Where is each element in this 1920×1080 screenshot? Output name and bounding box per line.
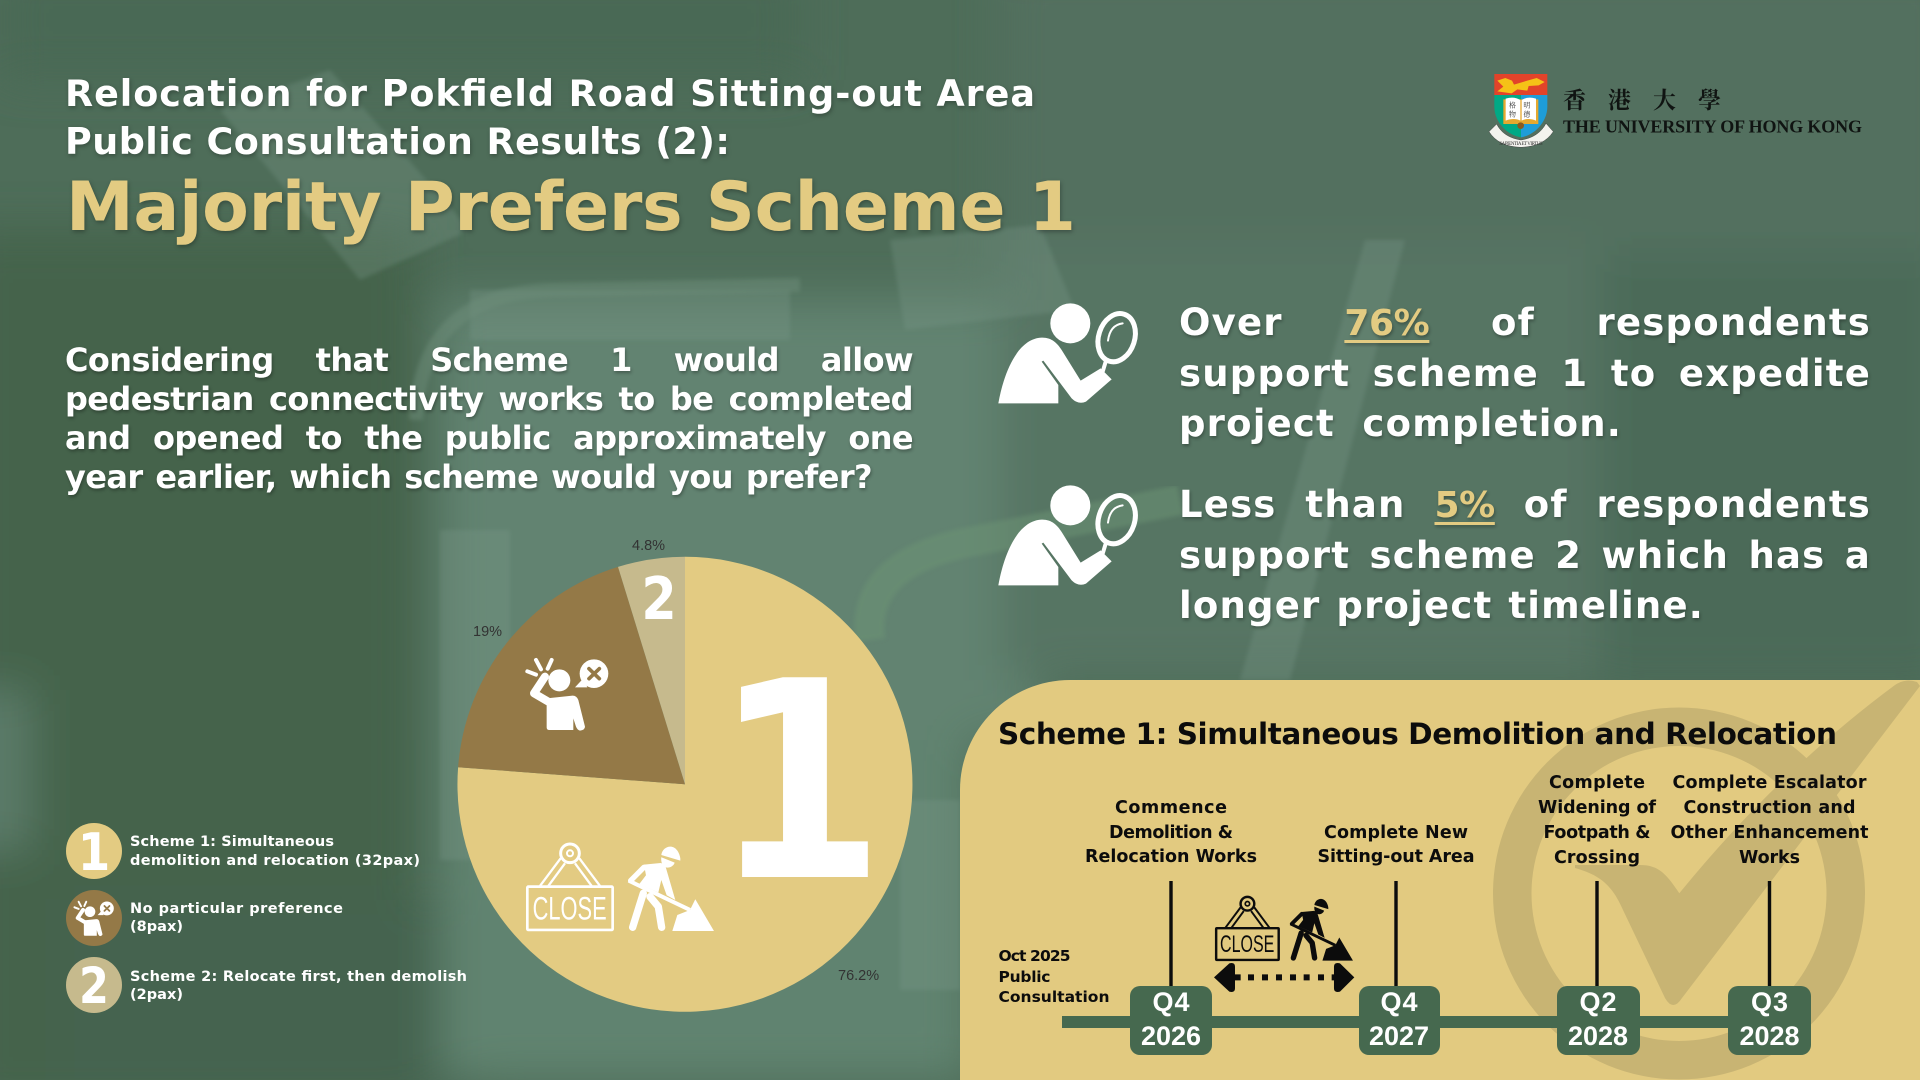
icon: person with magnifier 2 xyxy=(998,485,1141,585)
milestone Q4 2026: Q4 xyxy=(1152,987,1190,1017)
survey question: pedestrian connectivity works to be completed xyxy=(65,380,913,418)
title line 2: Public Consultation Results (2): xyxy=(65,120,730,163)
milestone Q4 2027 xyxy=(1318,823,1474,1055)
icon: confused person xyxy=(527,659,608,731)
milestone Q3 2028: 2028 xyxy=(1740,1021,1800,1051)
milestone Q2 2028: Crossing xyxy=(1554,848,1640,868)
logo crest: SAPIENTIA ET VIRTUS xyxy=(1499,142,1543,147)
milestone Q2 2028: Footpath & xyxy=(1544,823,1650,843)
survey question: Considering that Scheme 1 would allow xyxy=(65,341,913,379)
logo crest xyxy=(1489,74,1553,147)
arrow: construction duration xyxy=(1214,963,1354,992)
milestone Q3 2028: Q3 xyxy=(1751,987,1788,1017)
milestone Q4 2026: Commence xyxy=(1115,798,1227,818)
timeline xyxy=(998,773,1868,1055)
finding: 76% support scheme 1: Over 76% of respondents xyxy=(1179,301,1871,344)
title line 1: Relocation for Pokfield Road Sitting-out Area xyxy=(65,72,1035,115)
finding: under 5% support scheme 2: Less than 5% of respondents xyxy=(1179,483,1871,526)
legend item: no preference xyxy=(66,890,343,946)
timeline bar xyxy=(1062,1016,1752,1028)
finding: 76% support scheme 1: project completion. xyxy=(1179,402,1622,445)
logo crest: 德 xyxy=(1523,108,1531,118)
milestone Q4 2026 xyxy=(1085,798,1257,1055)
start label: Oct 2025 public consultation: Consultation xyxy=(998,988,1110,1006)
milestone Q3 2028: Construction and xyxy=(1684,798,1856,818)
logo English name: THE UNIVERSITY OF HONG KONG xyxy=(1563,116,1862,136)
milestone Q4 2027: Sitting-out Area xyxy=(1318,847,1474,867)
icon: worker with shovel xyxy=(629,847,714,931)
panel heading: Scheme 1: Simultaneous Demolition and Relocation xyxy=(998,717,1837,751)
milestone Q4 2026: Demolition & xyxy=(1109,823,1233,843)
milestone Q2 2028: Q2 xyxy=(1580,987,1616,1017)
legend item: scheme 1: Scheme 1: Simultaneous xyxy=(130,834,334,850)
title block xyxy=(65,72,1076,247)
pie label 4.8%: 4.8% xyxy=(632,538,665,554)
finding: under 5% support scheme 2: support scheme 2 which has a xyxy=(1179,534,1871,577)
finding: 76% support scheme 1: support scheme 1 to expedite xyxy=(1179,352,1871,395)
slice: scheme 1 xyxy=(457,557,912,1012)
icon: close sign: CLOSE xyxy=(533,889,607,926)
pie label 76.2%: 76.2% xyxy=(838,968,879,984)
slice: no preference xyxy=(458,567,685,784)
milestone Q3 2028: Other Enhancement xyxy=(1670,823,1868,843)
icon: worker with shovel, black xyxy=(1290,899,1353,961)
watermark: check mark in ring xyxy=(1493,681,1920,1080)
start label: Oct 2025 public consultation: Public xyxy=(998,968,1050,986)
legend item: scheme 2: Scheme 2: Relocate first, then demolish xyxy=(130,969,467,985)
legend item: scheme 1: demolition and relocation (32pax) xyxy=(130,853,420,869)
milestone Q2 2028: Complete xyxy=(1549,773,1645,793)
finding: under 5% support scheme 2: longer project timeline. xyxy=(1179,584,1704,627)
main headline: Majority Prefers Scheme 1 xyxy=(66,168,1076,247)
survey question: and opened to the public approximately one xyxy=(65,419,913,457)
panel: scheme 1 timeline xyxy=(960,680,1920,1080)
milestone Q3 2028 xyxy=(1670,773,1868,1055)
connector lines xyxy=(1171,881,1770,986)
legend item: no preference: No particular preference xyxy=(130,901,343,917)
finding: 76% support scheme 1 xyxy=(1179,301,1871,447)
finding: under 5% support scheme 2 xyxy=(1179,483,1871,630)
logo crest: 格 xyxy=(1509,99,1516,109)
pie label 19%: 19% xyxy=(473,624,502,640)
milestone Q2 2028 xyxy=(1538,773,1656,1055)
legend item: scheme 2: (2pax) xyxy=(130,987,183,1003)
legend item: scheme 1: 1 xyxy=(78,822,110,883)
pie chart xyxy=(457,538,912,1012)
milestone Q4 2027: Complete New xyxy=(1324,823,1468,843)
survey question xyxy=(65,341,914,498)
start label: Oct 2025 public consultation: Oct 2025 xyxy=(998,947,1070,965)
numeral 1: 1 xyxy=(713,624,885,942)
legend item: scheme 2: 2 xyxy=(79,957,109,1015)
icon: close sign xyxy=(527,844,613,930)
logo Chinese name: 香港大學 xyxy=(1563,88,1743,113)
numeral 2: 2 xyxy=(641,564,677,633)
logo crest: 明 xyxy=(1523,99,1530,109)
logo: University of Hong Kong xyxy=(1489,74,1862,147)
icon: close sign, black xyxy=(1216,897,1279,960)
milestone Q4 2027: Q4 xyxy=(1380,987,1418,1017)
slice: scheme 2 xyxy=(618,557,685,784)
milestone Q4 2027: 2027 xyxy=(1369,1021,1429,1051)
legend item: scheme 1 xyxy=(66,822,420,883)
legend item: no preference: (8pax) xyxy=(130,919,183,935)
panel background xyxy=(960,680,1920,1080)
milestone Q4 2026: 2026 xyxy=(1141,1021,1201,1051)
milestone Q2 2028: 2028 xyxy=(1568,1021,1628,1051)
icon: person with magnifier 1 xyxy=(998,303,1141,403)
legend xyxy=(66,822,467,1015)
milestone Q3 2028: Works xyxy=(1739,848,1800,868)
milestone Q4 2026: Relocation Works xyxy=(1085,847,1257,867)
logo crest: 物 xyxy=(1509,108,1516,118)
milestone Q3 2028: Complete Escalator xyxy=(1672,773,1867,793)
survey question: year earlier, which scheme would you prefer? xyxy=(65,458,872,496)
milestone Q2 2028: Widening of xyxy=(1538,798,1656,818)
icon: close sign, black: CLOSE xyxy=(1220,931,1274,958)
legend item: scheme 2 xyxy=(66,957,467,1015)
